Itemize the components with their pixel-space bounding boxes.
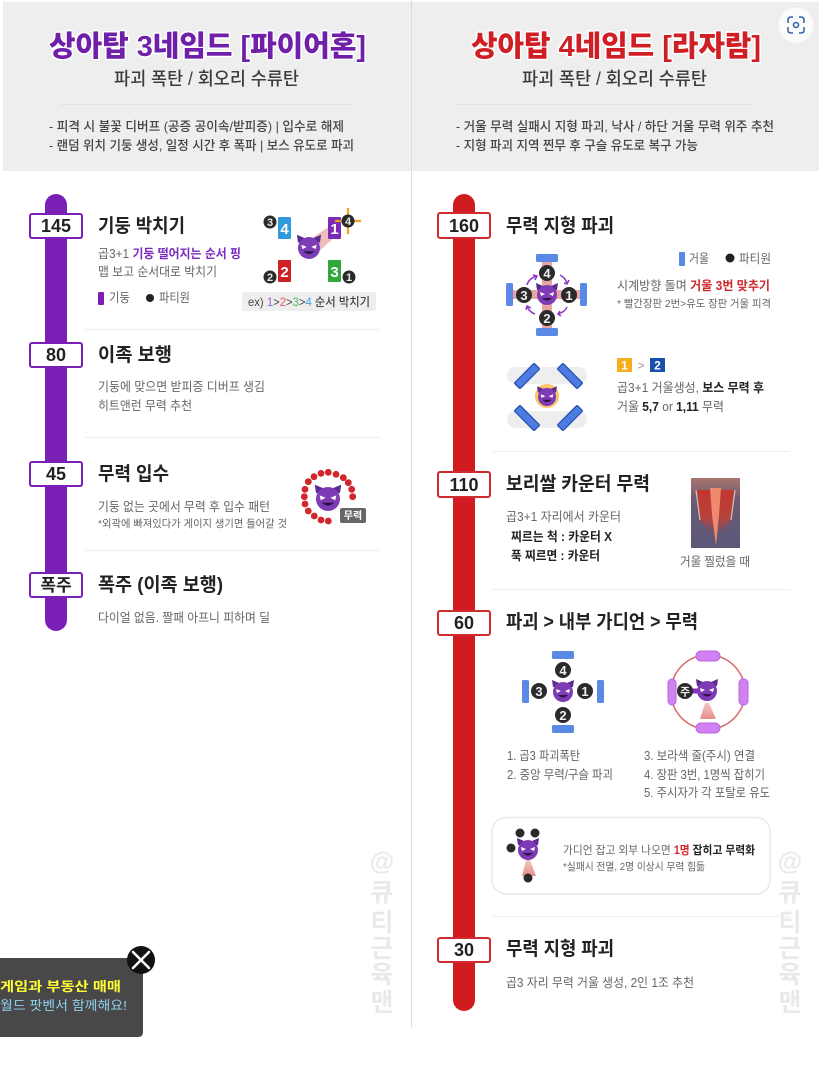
summary lines left <box>49 119 354 153</box>
subtitle right: 파괴 폭탄 / 회오리 수류탄 <box>522 69 707 89</box>
instruction text: 시계방향 돌며 거울 3번 맞추기 <box>617 278 770 293</box>
steps right: 3. 보라색 줄(주시) 연결 <box>644 749 755 763</box>
title: 4 named: 상아탑 4네임드 [라자람] <box>471 30 761 63</box>
watermark right: @큐티근육맨 <box>778 848 802 1017</box>
diagram: four party positions: 4 <box>559 663 567 678</box>
badge 60: 60 <box>454 613 474 633</box>
watermark left: @큐티근육맨 <box>370 848 394 1017</box>
phase 110: barley counter <box>438 472 750 569</box>
heading: 기둥 박치기 <box>98 215 185 237</box>
timeline: left purple bar <box>45 194 67 631</box>
steps right: 5. 주시자가 각 포탈로 유도 <box>644 786 770 800</box>
diagram: pillars: 4 <box>280 221 289 238</box>
badge 45 <box>30 462 82 486</box>
heading: 보리쌀 카운터 무력 <box>506 473 650 495</box>
diagram: guardian ring: 주 <box>680 686 690 698</box>
title: 3 named: 상아탑 3네임드 [파이어혼] <box>49 30 366 63</box>
badge 160: 160 <box>449 216 479 236</box>
legend <box>679 252 771 266</box>
phase tags 1 > 2: 1 <box>621 358 628 372</box>
heading: 파괴 > 내부 가디언 > 무력 <box>506 611 698 633</box>
diagram: four diagonal mirrors <box>507 363 587 431</box>
caption: 거울 찔렀을 때 <box>680 555 750 569</box>
phase 45: stagger and dive <box>30 462 366 530</box>
screenshot: mirror stabbed <box>691 478 740 548</box>
steps right: 4. 장판 3번, 1명씩 잡히기 <box>644 768 765 782</box>
heading: 무력 입수 <box>98 463 169 485</box>
phase tags 1 > 2 <box>617 358 665 372</box>
description: 푹 찌르면 : 카운터 <box>511 548 600 563</box>
description: 곱3+1 기둥 떨어지는 순서 핑 <box>98 246 241 261</box>
description: *외곽에 빠져있다가 게이지 생기면 들어갈 것 <box>98 517 287 530</box>
steps right <box>644 749 770 800</box>
diagram: mirror rotation <box>506 254 587 336</box>
mirror text <box>617 380 764 414</box>
diagram: pillars: 4 <box>345 216 352 228</box>
badge 145 <box>30 214 82 238</box>
description: 찌르는 척 : 카운터 X <box>511 529 613 544</box>
diagram: pillars: 2 <box>280 264 289 281</box>
diagram: mirror rotation: 3 <box>520 288 528 303</box>
diagram: caught player <box>506 828 540 882</box>
badge 160 <box>438 213 490 238</box>
description: 기둥 없는 곳에서 무력 후 입수 패턴 <box>98 500 270 514</box>
steps left <box>507 749 613 782</box>
callout box <box>492 818 770 894</box>
description <box>98 380 265 413</box>
badge 110 <box>438 472 490 497</box>
phase 160: stagger terrain break <box>438 213 771 431</box>
heading: 무력 지형 파괴 <box>506 938 614 960</box>
phase tags 1 > 2: 2 <box>654 358 661 372</box>
description: 곱3 자리 무력 거울 생성, 2인 1조 추천 <box>506 975 694 990</box>
diagram: four party positions: 2 <box>559 708 567 723</box>
description: 히트앤런 무력 추천 <box>98 398 192 413</box>
diagram: four party positions: 1 <box>581 684 589 699</box>
phase 30: stagger terrain break <box>438 938 694 990</box>
subtitle left: 파괴 폭탄 / 회오리 수류탄 <box>114 69 299 89</box>
ad text <box>0 979 127 1013</box>
legend <box>98 291 190 305</box>
summary lines left: - 피격 시 불꽃 디버프 (공증 공이속/받피증) | 입수로 해제 <box>49 119 344 134</box>
diagram: four party positions: 3 <box>535 684 543 699</box>
summary lines right <box>456 119 774 153</box>
summary lines right: - 지형 파괴 지역 찐무 후 구슬 유도로 복구 가능 <box>456 138 698 153</box>
badge 80 <box>30 343 82 367</box>
description: 맵 보고 순서대로 박치기 <box>98 265 217 279</box>
phase 80: biped walk <box>30 343 265 413</box>
ad popup <box>0 946 155 1037</box>
ad text: 월드 팟벤서 함께해요! <box>0 998 127 1013</box>
callout text <box>563 843 755 873</box>
badge 110: 110 <box>449 475 479 495</box>
badge 30 <box>438 938 490 962</box>
diagram: mirror rotation: 2 <box>543 311 551 326</box>
panel: left header <box>3 2 411 171</box>
mirror text: 곱3+1 거울생성, 보스 무력 후 <box>617 380 764 395</box>
legend: 파티원 <box>159 291 190 305</box>
ad text: 게임과 부동산 매매 <box>0 979 121 994</box>
callout text: 가디언 잡고 외부 나오면 1명 잡히고 무력화 <box>563 843 755 857</box>
badge enrage <box>30 573 82 597</box>
mirror text: 거울 5,7 or 1,11 무력 <box>617 400 724 414</box>
rotation arrows <box>526 275 569 316</box>
badge 145: 145 <box>41 216 71 236</box>
badge 45: 45 <box>46 464 66 484</box>
diagram: mirror rotation: 4 <box>543 266 551 281</box>
instruction text: * 빨간장판 2번>유도 장판 거울 피격 <box>617 297 771 310</box>
summary lines right: - 거울 무력 실패시 지형 파괴, 낙사 / 하단 거울 무력 위주 추천 <box>456 119 774 134</box>
timeline: right red bar <box>453 194 475 1011</box>
heading: 이족 보행 <box>98 344 172 366</box>
badge 30: 30 <box>454 940 474 960</box>
diagram: guardian ring <box>668 651 748 733</box>
description <box>98 246 241 279</box>
description: 곱3+1 자리에서 카운터 <box>506 510 621 524</box>
diagram: pillars: 1 <box>330 221 339 238</box>
diagram: pillars: 1 <box>346 272 352 284</box>
diagram: pillars: 3 <box>330 264 339 281</box>
legend: 거울 <box>689 252 709 266</box>
diagram: gauge ring: 무력 <box>344 509 362 522</box>
description: 다이얼 없음. 짤패 아프니 피하며 딜 <box>98 611 270 625</box>
instruction text <box>617 278 771 310</box>
diagram: pillars: 3 <box>267 217 273 229</box>
example order tag: ex) 1>2>3>4 순서 박치기 <box>248 295 370 309</box>
steps left: 2. 중앙 무력/구슬 파괴 <box>507 768 613 782</box>
description <box>98 500 287 530</box>
diagram: pillars <box>264 208 361 284</box>
heading: 무력 지형 파괴 <box>506 215 614 237</box>
summary lines left: - 랜덤 위치 기둥 생성, 일정 시간 후 폭파 | 보스 유도로 파괴 <box>49 138 354 153</box>
diagram: gauge ring <box>301 469 366 524</box>
close button <box>127 946 155 974</box>
badge 80: 80 <box>46 345 66 365</box>
phase tags 1 > 2: > <box>637 358 645 372</box>
diagram: four party positions <box>522 651 604 733</box>
description <box>506 510 621 563</box>
badge enrage: 폭주 <box>40 576 72 595</box>
description: 기둥에 맞으면 받피증 디버프 생김 <box>98 380 265 394</box>
badge 60 <box>438 611 490 635</box>
callout text: *실패시 전멸, 2명 이상시 무력 힘듦 <box>563 861 705 873</box>
steps left: 1. 곱3 파괴폭탄 <box>507 749 580 763</box>
legend: 기둥 <box>109 291 130 305</box>
example order tag <box>242 292 376 311</box>
diagram: pillars: 2 <box>267 272 273 284</box>
phase 60: break guardian stagger <box>438 611 770 894</box>
heading: 폭주 (이족 보행) <box>98 574 223 596</box>
phase 145: pillar headbutt <box>30 208 376 311</box>
legend: 파티원 <box>739 252 771 266</box>
diagram: mirror rotation: 1 <box>565 288 573 303</box>
phase enrage <box>30 573 270 625</box>
camera search button <box>778 8 814 42</box>
panel: right header <box>412 2 819 171</box>
